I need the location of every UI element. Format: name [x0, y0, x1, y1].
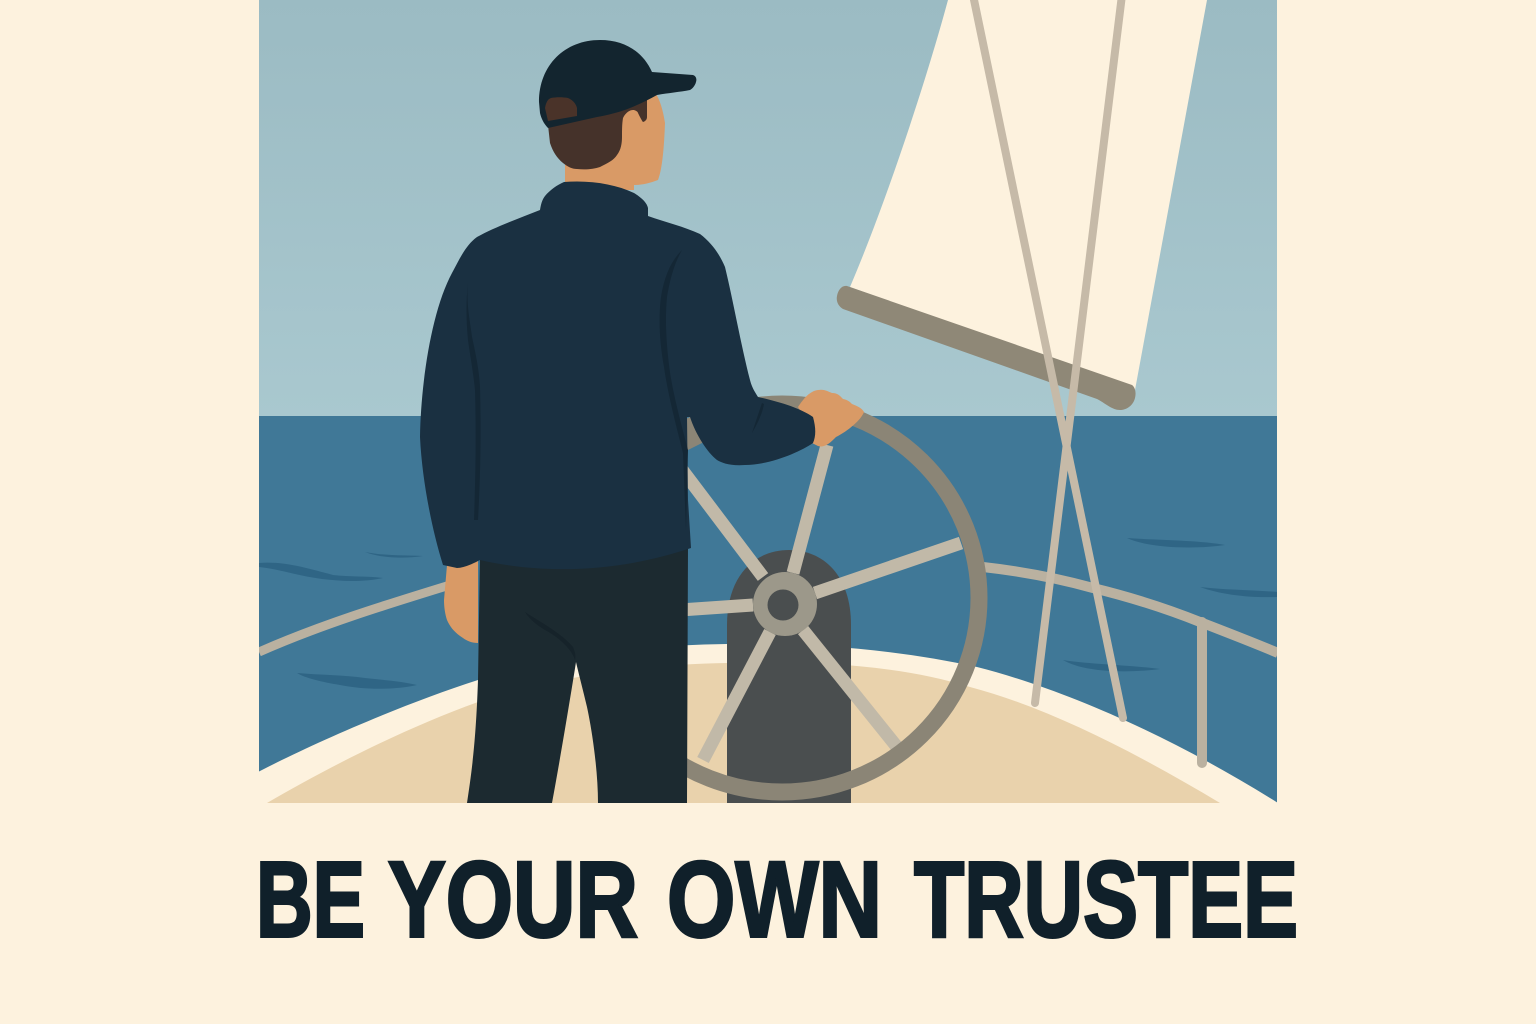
sky	[259, 0, 1277, 417]
left hand	[444, 556, 478, 643]
cap strap opening	[545, 97, 577, 121]
deck railing	[259, 567, 1278, 763]
neck and face	[565, 92, 665, 190]
cap	[539, 40, 696, 128]
sail boom	[837, 286, 1136, 410]
jacket seams	[466, 250, 764, 530]
wheel rim	[687, 396, 988, 800]
deck	[267, 662, 1220, 803]
helm pedestal	[727, 550, 851, 803]
rigging ropes	[973, 0, 1123, 718]
title: TRUSTEE	[914, 838, 1298, 960]
trouser crease	[525, 612, 575, 660]
title: OWN	[667, 838, 882, 960]
jacket	[420, 181, 815, 569]
ship wheel	[687, 396, 988, 800]
wheel spokes	[680, 445, 961, 760]
trousers	[467, 545, 688, 803]
sea	[259, 416, 1277, 803]
title	[256, 838, 1298, 960]
water ripples	[259, 538, 1278, 689]
illustration: skipper at the helm	[258, 0, 1278, 803]
sail	[850, 0, 1207, 390]
person	[420, 40, 864, 803]
title: YOUR	[388, 838, 638, 960]
boat hull band	[258, 644, 1278, 803]
title: BE	[256, 838, 365, 960]
wheel hub	[753, 572, 817, 636]
right hand	[798, 390, 864, 446]
hair	[548, 100, 647, 169]
